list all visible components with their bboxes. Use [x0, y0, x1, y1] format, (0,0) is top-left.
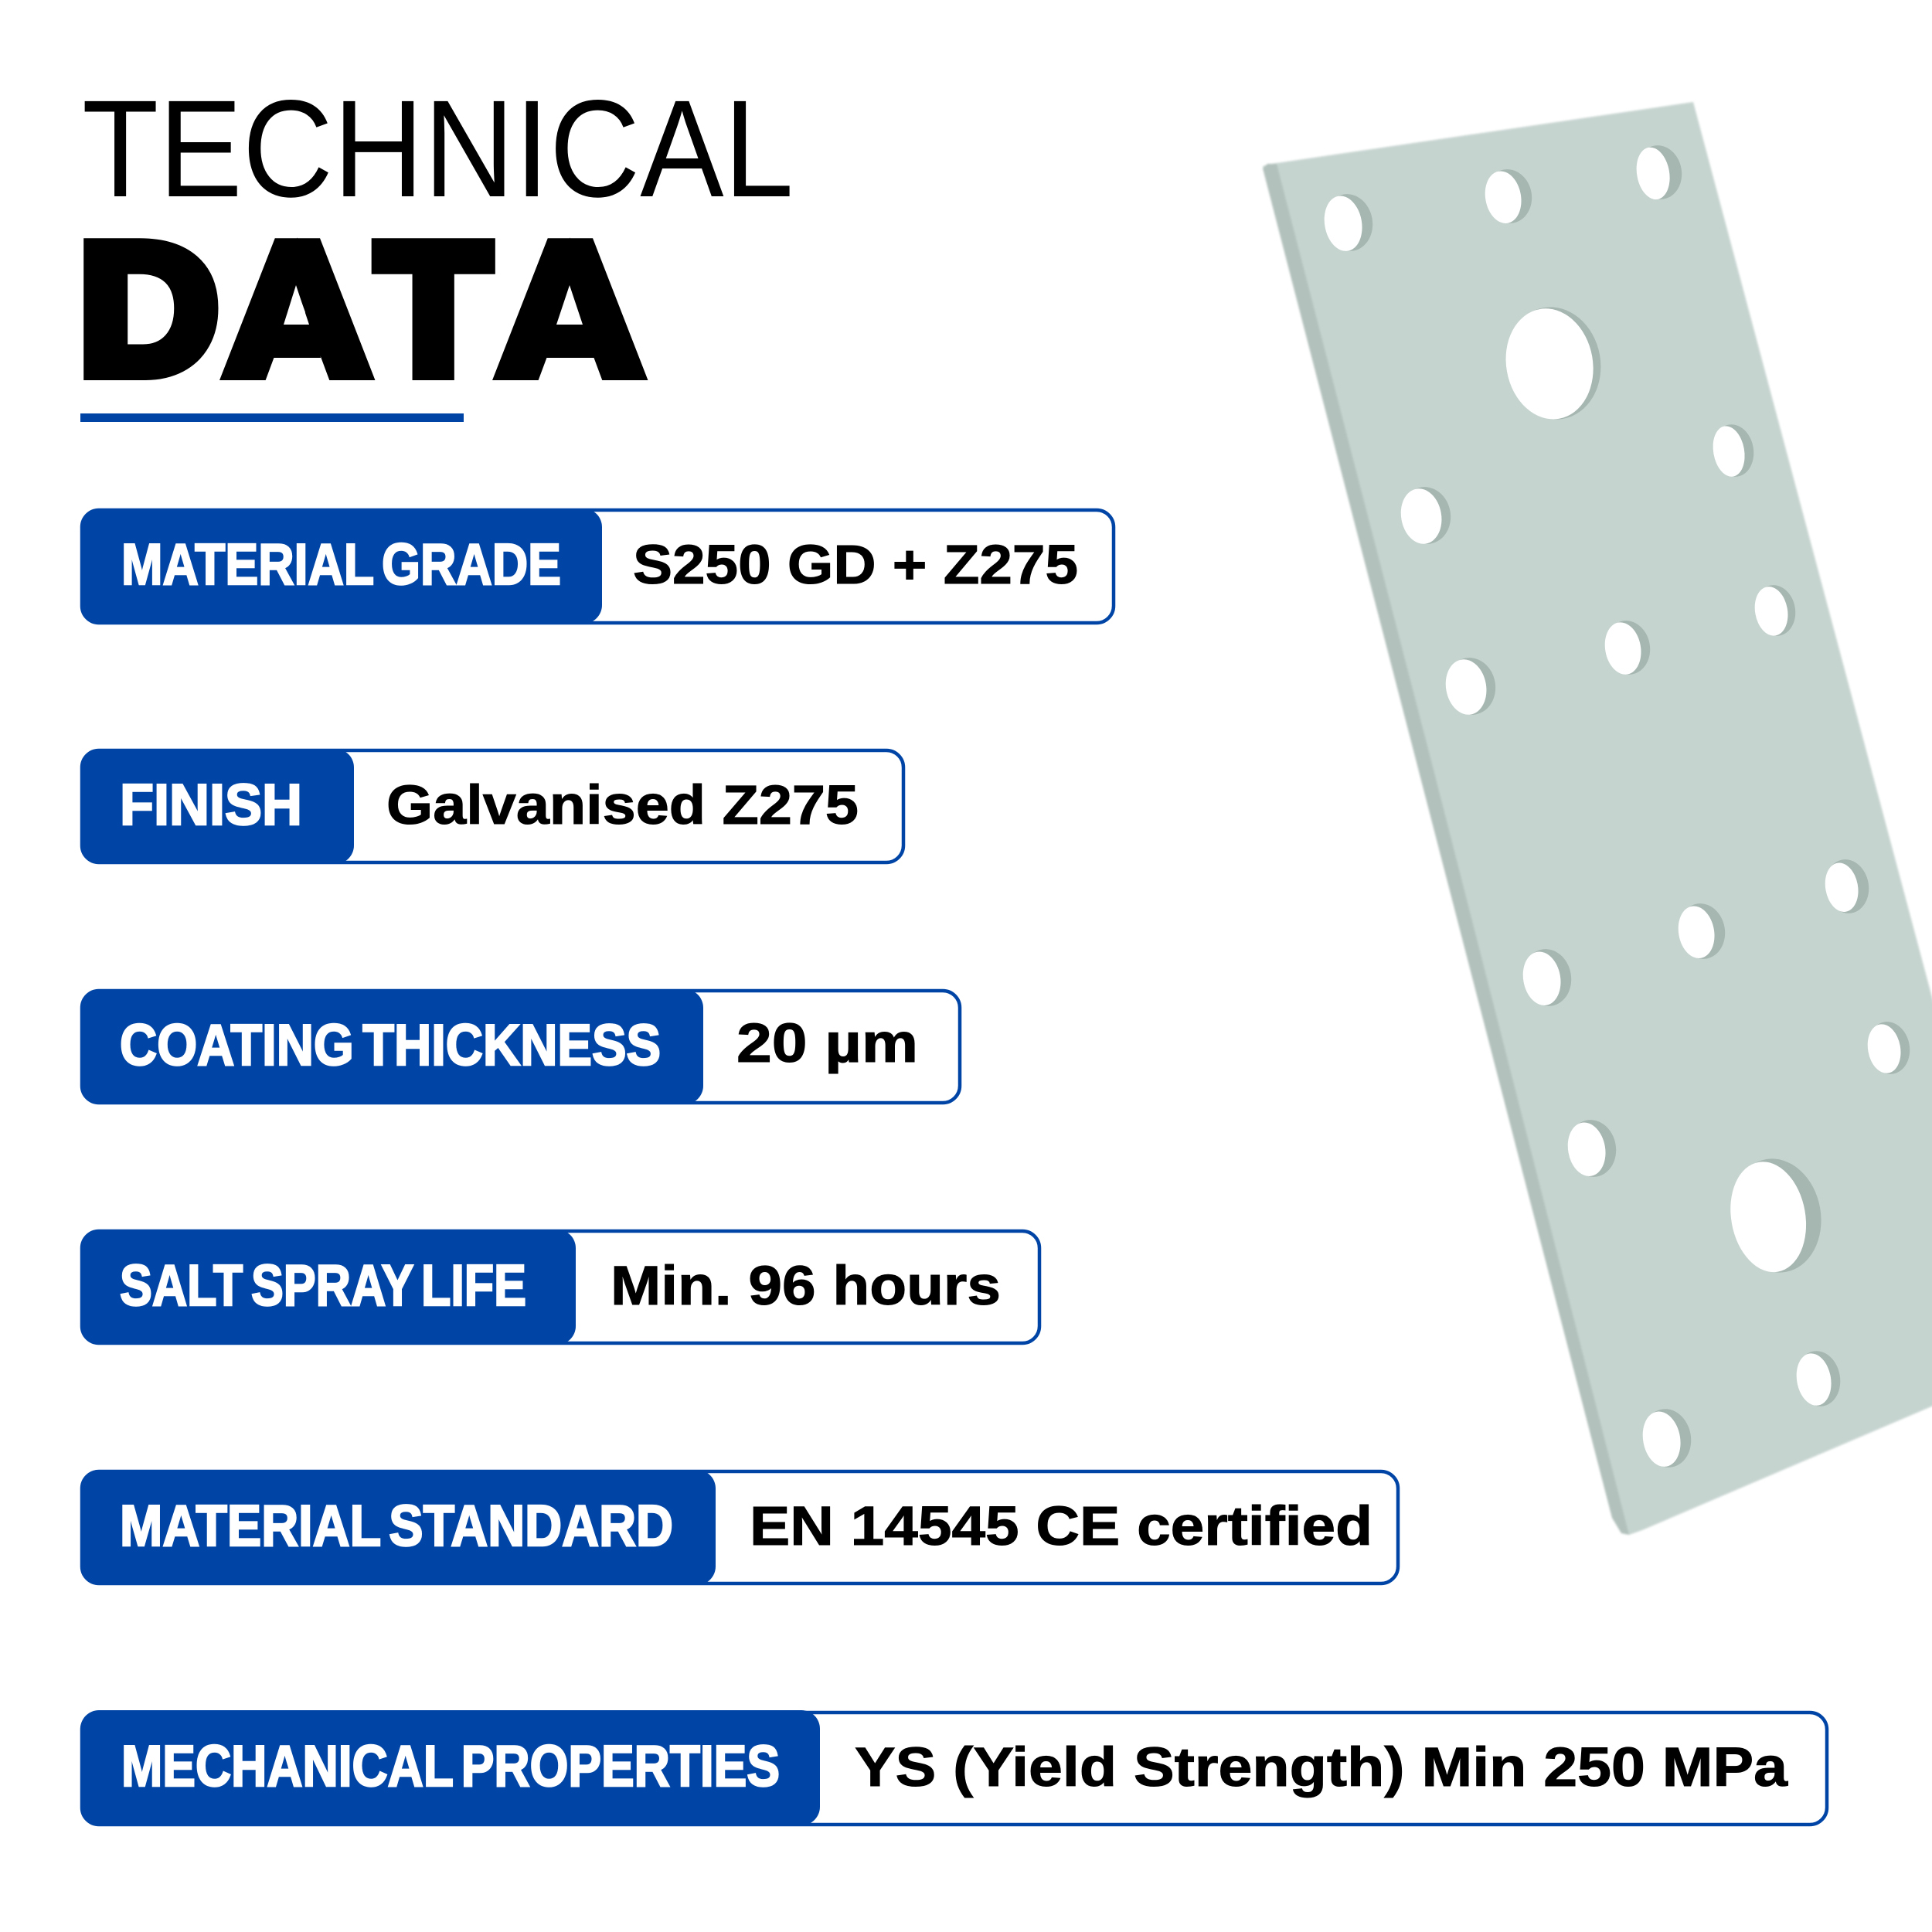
- title: data: A: [226, 207, 369, 412]
- row: finish: Galvanised Z275: [386, 775, 859, 836]
- title: technical: TECHNICAL: [82, 71, 794, 226]
- row: mechanical properties: YS (Yield Strength) Min 250 MPa: [855, 1737, 1788, 1798]
- title: data: A: [499, 207, 641, 412]
- row: finish: [80, 749, 903, 864]
- title underline: [80, 413, 464, 422]
- row: material standard: EN 14545 CE certified: [750, 1496, 1372, 1557]
- row: salt spray life: [80, 1230, 1039, 1345]
- row: material grade: [80, 509, 1114, 624]
- title: data: T: [377, 207, 489, 412]
- row: mechanical properties: MECHANICAL PROPERTIES: [121, 1733, 780, 1798]
- row: coating thickness: COATING THICKNESS: [120, 1012, 661, 1077]
- row: finish: FINISH: [120, 772, 302, 837]
- row: material grade: MATERIAL GRADE: [121, 532, 561, 597]
- title: data: D: [79, 206, 218, 412]
- plate holes: [1320, 141, 1913, 1471]
- row: salt spray life: Min. 96 hours: [611, 1256, 1001, 1317]
- row: material grade: S250 GD + Z275: [633, 535, 1078, 596]
- row: coating thickness: [80, 989, 960, 1104]
- row: salt spray life: SALT SPRAY LIFE: [120, 1253, 526, 1318]
- row: material standard: [80, 1470, 1398, 1585]
- title: data: [79, 206, 641, 412]
- row: material standard: MATERIAL STANDARD: [120, 1493, 673, 1558]
- row: mechanical properties: [80, 1710, 1827, 1825]
- row: coating thickness: 20 µm: [736, 1013, 918, 1074]
- metal plate image: [1263, 102, 1932, 1535]
